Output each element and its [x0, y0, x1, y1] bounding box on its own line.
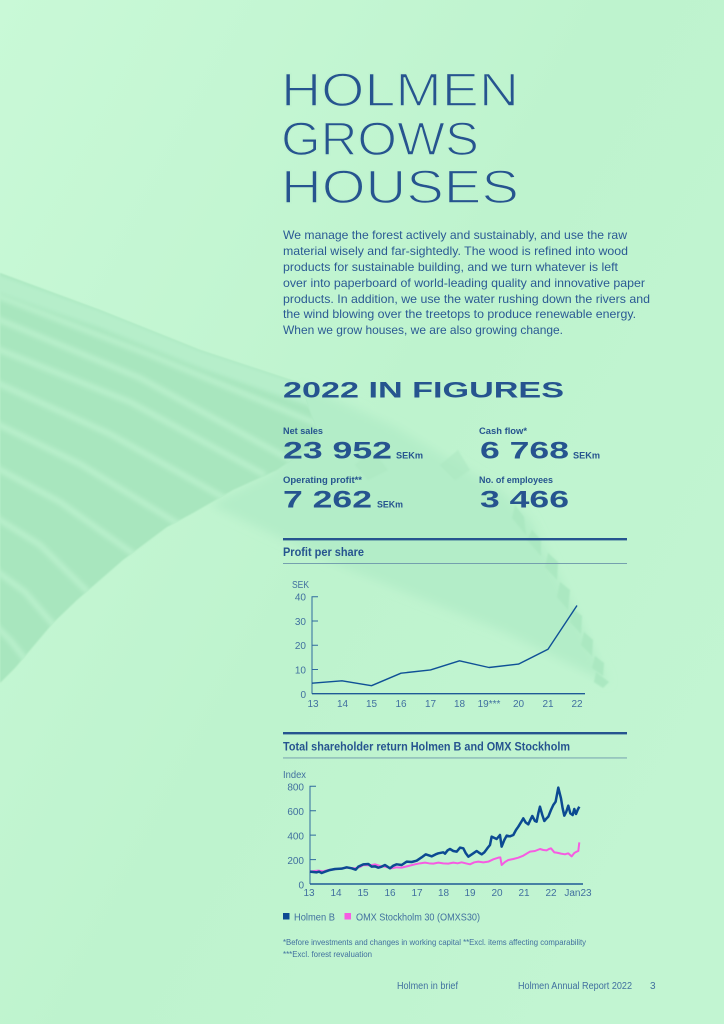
line chart: shareholder return: Jan23	[564, 888, 592, 899]
line chart: profit per share: 0	[300, 690, 306, 701]
photo: sawtooth edge	[355, 450, 609, 688]
line chart: shareholder return: 20	[491, 888, 503, 899]
figure: net sales: Net sales	[283, 426, 323, 437]
footnotes: ***Excl. forest revaluation	[283, 949, 372, 959]
line chart: profit per share: 16	[395, 699, 407, 710]
title: GROWS	[281, 112, 479, 165]
figure: operating profit	[283, 475, 403, 514]
line chart: shareholder return: 800	[287, 782, 304, 794]
line chart: profit per share: 13	[307, 699, 319, 710]
line chart: profit per share: 40	[295, 592, 306, 604]
page footer: Holmen in brief	[397, 981, 458, 992]
line chart: profit per share: 20	[513, 699, 524, 710]
figure: cash flow	[479, 426, 600, 464]
line chart: shareholder return: 22	[545, 888, 557, 899]
line chart: shareholder return: 14	[330, 888, 342, 899]
title: HOUSES	[281, 160, 519, 213]
page footer	[397, 981, 656, 992]
figure: operating profit: 7 262	[283, 486, 372, 514]
figure: cash flow: Cash flow*	[479, 426, 527, 437]
intro text block: products. In addition, we use the water rushing down the rivers and	[283, 292, 650, 306]
line chart: shareholder return: 19	[464, 888, 476, 899]
figure: operating profit: Operating profit**	[283, 475, 362, 486]
line chart: shareholder return: 21	[518, 888, 530, 899]
intro text block: over into paperboard of world-leading quality and innovative paper	[283, 276, 645, 290]
line chart: profit per share: 20	[295, 641, 306, 652]
page footer: Holmen Annual Report 2022	[518, 981, 632, 992]
line chart: profit per share: 30	[295, 617, 306, 628]
legend: Holmen B	[294, 912, 335, 924]
line chart: shareholder return: Index	[283, 770, 306, 781]
legend	[283, 912, 480, 924]
line chart: shareholder return: 400	[287, 832, 304, 842]
footnotes: *Before investments and changes in working capital **Excl. items affecting comparability	[283, 937, 587, 947]
line chart: profit per share	[292, 580, 585, 710]
intro text block: the wind blowing over the treetops to produce renewable energy.	[283, 307, 636, 321]
line chart: shareholder return: 13	[303, 888, 315, 899]
figure: employees	[479, 475, 569, 514]
line chart: profit per share: 22	[571, 699, 583, 710]
footnotes	[283, 937, 587, 959]
series: OMX Stockholm 30	[310, 842, 579, 872]
intro text block	[283, 228, 650, 337]
line chart: shareholder return: 17	[411, 888, 423, 899]
figure: cash flow: 6 768	[480, 438, 569, 464]
chart heading: total shareholder return: Total shareholder return Holmen B and OMX Stockholm	[283, 742, 570, 754]
photo: near section of board	[0, 273, 320, 683]
line chart: profit per share: 17	[425, 699, 436, 710]
series: Holmen B	[310, 788, 579, 873]
photo: far section of board	[210, 383, 608, 683]
figure: net sales: 23 952	[283, 438, 392, 464]
intro text block: We manage the forest actively and sustainably, and use the raw	[283, 228, 627, 242]
line chart: profit per share: 10	[295, 666, 306, 676]
line chart: profit per share: 14	[337, 699, 348, 710]
background photo: corrugated board	[0, 273, 609, 688]
page footer: 3	[650, 981, 656, 992]
intro text block: products for sustainable building, and we turn whatever is left	[283, 260, 619, 274]
line chart: shareholder return	[283, 770, 592, 899]
chart heading: profit per share: Profit per share	[283, 547, 364, 559]
line chart: shareholder return: 18	[438, 888, 449, 899]
key figures	[283, 426, 600, 514]
line chart: shareholder return: 600	[287, 807, 304, 818]
figure: employees: 3 466	[480, 486, 569, 514]
line chart: profit per share: 18	[454, 699, 465, 710]
figure: cash flow: SEKm	[573, 450, 600, 462]
line chart: profit per share: 15	[366, 699, 377, 710]
line chart: profit per share: SEK	[292, 580, 309, 591]
figure: net sales: SEKm	[396, 450, 423, 462]
line chart: shareholder return: 16	[384, 888, 396, 899]
line chart: shareholder return: 0	[298, 880, 304, 892]
figure: operating profit: SEKm	[377, 500, 403, 510]
title: HOLMEN	[281, 63, 519, 116]
intro text block: material wisely and far-sightedly. The wood is refined into wood	[283, 244, 628, 258]
title	[281, 63, 519, 213]
heading: 2022 in figures: 2022 IN FIGURES	[283, 378, 564, 402]
figure: net sales	[283, 426, 423, 464]
legend: OMX Stockholm 30 (OMXS30)	[356, 912, 480, 924]
line chart: profit per share: 21	[542, 699, 554, 710]
line chart: shareholder return: 15	[357, 888, 369, 899]
line chart: shareholder return: 200	[287, 856, 304, 867]
intro text block: When we grow houses, we are also growing change.	[283, 323, 563, 337]
line chart: profit per share: 19***	[478, 699, 500, 710]
figure: employees: No. of employees	[479, 475, 553, 486]
